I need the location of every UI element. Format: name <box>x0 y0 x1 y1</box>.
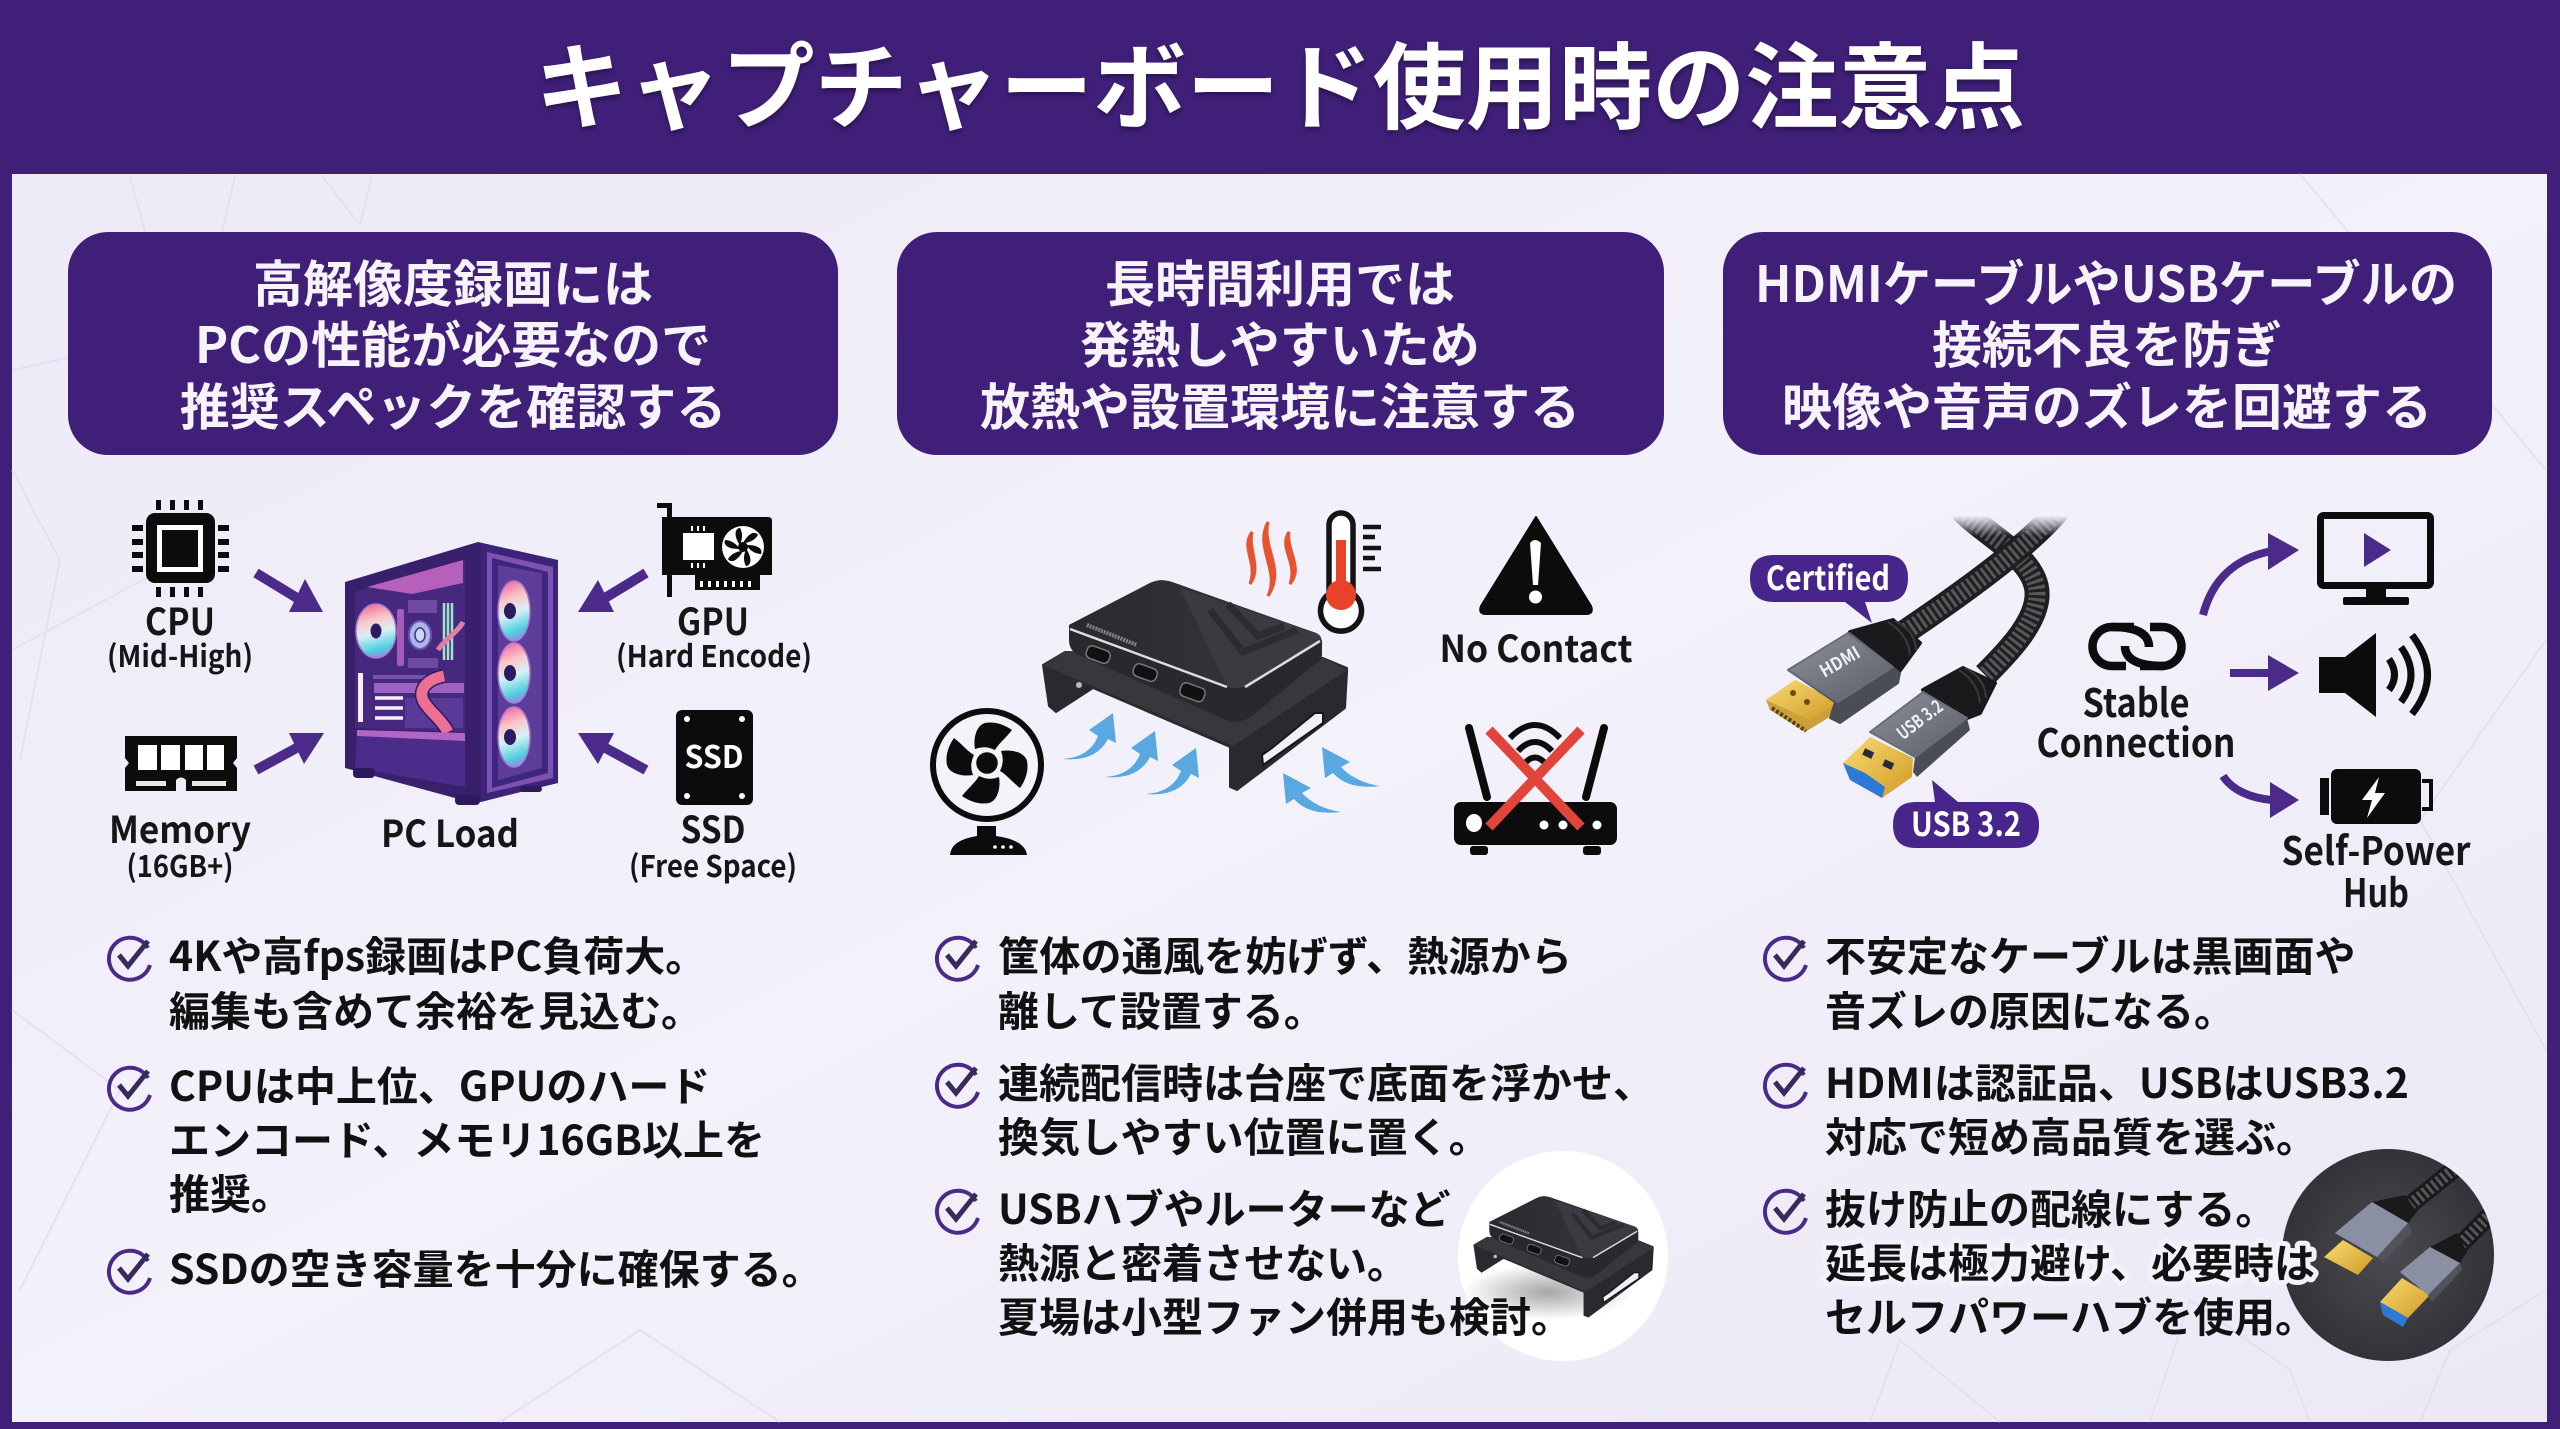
panel: PC performance <box>68 232 838 1296</box>
icon: heat waves <box>1248 522 1295 596</box>
arrow: CPU to PC <box>256 573 323 612</box>
bullet 1 <box>937 923 1572 1038</box>
label: SSD <box>629 800 797 886</box>
label: Stable Connection <box>2036 673 2236 769</box>
callout: Certified <box>1750 552 1908 623</box>
bullet 3: SSDの空き容量を十分に確保する。 <box>169 1236 823 1296</box>
HDMI plug: HDMI <box>1814 639 1865 683</box>
icon: capture device on stand <box>1043 580 1347 790</box>
bullet 3: セルフパワーハブを使用。 <box>1825 1284 2316 1344</box>
bullet 3: 延長は極力避け、必要時は <box>1825 1230 2315 1290</box>
heading pill: cables: 接続不良を防ぎ <box>1932 306 2282 378</box>
label: Self-Power Hub <box>2282 821 2471 919</box>
callout: USB 3.2: USB 3.2 <box>1911 798 2021 846</box>
photo: HDMI and USB cables <box>1766 510 2070 798</box>
heading pill: heat: 発熱しやすいため <box>1080 306 1480 378</box>
label: GPU: GPU <box>677 592 749 646</box>
bullet 2: 連続配信時は台座で底面を浮かせ、 <box>998 1050 1654 1110</box>
bullet 3: 抜け防止の配線にする。 <box>1825 1176 2276 1236</box>
callout: USB 3.2 <box>1893 780 2039 848</box>
label: Stable Connection: Connection <box>2036 713 2236 769</box>
icon: monitor <box>2320 516 2430 605</box>
bubble image: small device <box>1458 1151 1668 1361</box>
icon: SSD <box>676 710 753 805</box>
arrow: to hub <box>2223 776 2299 818</box>
bullet 2 <box>1765 1050 2409 1164</box>
label: CPU: CPU <box>145 592 215 646</box>
icon: SSD: SSD <box>684 732 744 777</box>
label: CPU <box>107 592 253 676</box>
bullet list: cables <box>1765 923 2510 1361</box>
bullet 1: 4Kや高fps録画はPC負荷大。 <box>169 923 706 983</box>
label: No Contact: No Contact <box>1440 619 1632 673</box>
icon: warning triangle <box>1480 517 1592 614</box>
HDMI plug <box>1766 620 1920 732</box>
bullet 2 <box>937 1050 1654 1164</box>
USB plug: USB 3.2 <box>1891 693 1948 745</box>
icon: router crossed out <box>1454 725 1617 855</box>
bullet 2 <box>109 1053 765 1221</box>
arrow: to speaker <box>2230 655 2299 691</box>
heading pill: heat <box>897 232 1664 455</box>
bullet 1: 不安定なケーブルは黒画面や <box>1825 923 2356 983</box>
heading pill: heat: 放熱や設置環境に注意する <box>980 368 1580 440</box>
bullet 1: 離して設置する。 <box>998 978 1325 1038</box>
heading pill: PC performance: PCの性能が必要なので <box>195 306 711 378</box>
bullet 2: CPUは中上位、GPUのハード <box>169 1053 710 1113</box>
icon: memory <box>125 736 237 791</box>
icon: GPU <box>657 503 772 597</box>
icon: battery <box>2320 769 2431 824</box>
label: Self-Power Hub: Self-Power <box>2282 821 2471 877</box>
heading pill: cables: 映像や音声のズレを回避する <box>1782 368 2432 440</box>
panel: cables <box>1723 232 2510 1361</box>
arrow: SSD to PC <box>578 733 646 770</box>
arrow: to monitor <box>2203 533 2299 615</box>
icon: thermometer <box>1320 513 1381 631</box>
title: キャプチャーボード使用時の注意点 <box>535 13 2025 149</box>
bullet 3: USBハブやルーターなど <box>998 1176 1451 1236</box>
label: SSD: SSD <box>680 800 746 854</box>
bullet 1 <box>1765 923 2356 1038</box>
bullet 2: エンコード、メモリ16GB以上を <box>169 1107 765 1167</box>
icon: chain link <box>2092 627 2182 666</box>
bullet 2: 対応で短め高品質を選ぶ。 <box>1825 1104 2317 1164</box>
icon: desk fan <box>933 711 1041 855</box>
label: memory: (16GB+) <box>126 842 234 886</box>
label: SSD: (Free Space) <box>629 842 797 886</box>
bullet 3: 熱源と密着させない。 <box>998 1230 1408 1290</box>
heading pill: cables: HDMIケーブルやUSBケーブルの <box>1755 245 2457 317</box>
icon: PC tower <box>345 542 558 805</box>
label: memory <box>109 800 251 886</box>
bullet 1 <box>109 923 706 1038</box>
heading pill: PC performance: 推奨スペックを確認する <box>180 368 726 440</box>
bullet 1: 編集も含めて余裕を見込む。 <box>169 978 702 1038</box>
heading pill: PC performance <box>68 232 838 455</box>
icon: speaker <box>2319 633 2428 717</box>
label: memory: Memory <box>109 800 251 854</box>
heading pill: PC performance: 高解像度録画には <box>253 245 653 317</box>
bullet 3 <box>1765 1176 2316 1344</box>
bullet 3 <box>937 1176 1572 1344</box>
bullet 1: 筐体の通風を妨げず、熱源から <box>998 923 1572 983</box>
label: PC Load: PC Load <box>381 804 519 858</box>
label: CPU: (Mid-High) <box>107 632 253 676</box>
bullet 3: 夏場は小型ファン併用も検討。 <box>998 1284 1572 1344</box>
USB plug <box>1843 668 1995 798</box>
bullet 2: 推奨。 <box>169 1161 292 1221</box>
heading pill: heat: 長時間利用では <box>1105 245 1455 317</box>
bullet 2: 換気しやすい位置に置く。 <box>998 1104 1490 1164</box>
label: Self-Power Hub: Hub <box>2343 863 2409 919</box>
heading pill: cables <box>1723 232 2492 455</box>
arrows: blue airflow <box>1063 713 1380 813</box>
panel: heat <box>897 232 1668 1361</box>
arrow: memory to PC <box>256 733 324 770</box>
label: GPU: (Hard Encode) <box>616 632 812 676</box>
label: GPU <box>616 592 812 676</box>
label: Stable Connection: Stable <box>2082 673 2190 729</box>
bullet list: PC performance <box>109 923 823 1296</box>
icon: CPU <box>132 500 229 597</box>
bubble image: cables photo <box>2283 1149 2494 1361</box>
bullet list: heat <box>937 923 1668 1361</box>
bullet 1: 音ズレの原因になる。 <box>1825 978 2235 1038</box>
callout: Certified: Certified <box>1766 552 1890 600</box>
arrow: GPU to PC <box>578 573 646 612</box>
bullet 2: HDMIは認証品、USBはUSB3.2 <box>1825 1050 2409 1110</box>
